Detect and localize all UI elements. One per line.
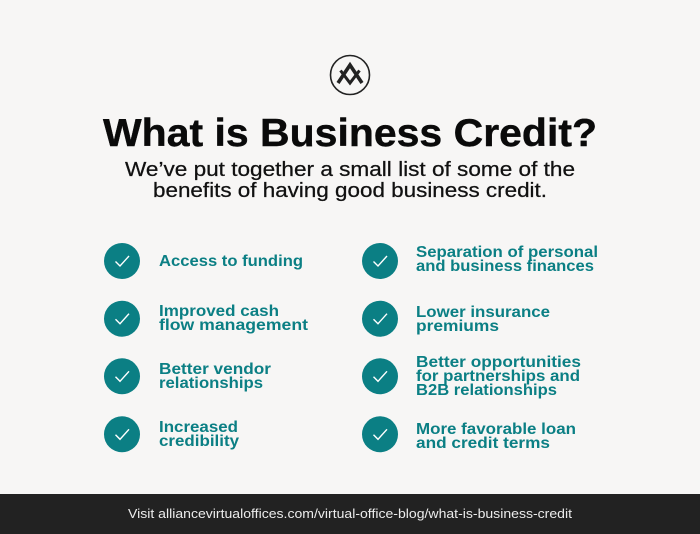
subtitle: We’ve put together a small list of some of the [125,159,575,181]
benefit: lower insurance premiums: premiums [416,318,499,335]
benefit: better opportunities [362,354,581,399]
subtitle [125,159,575,202]
benefit: better opportunities: Better opportunities [416,354,581,371]
benefit: better vendor relationships: relationships [159,375,263,392]
benefit: improved cash flow: flow management [159,317,309,334]
benefit: separation of finances: Separation of personal [416,244,598,261]
benefit: improved cash flow [104,301,309,337]
footer bar: Visit alliancevirtualoffices.com/virtual-office-blog/what-is-business-credit [128,506,572,521]
benefit: improved cash flow: Improved cash [159,303,279,320]
benefit: better vendor relationships [104,358,271,394]
benefit: favorable loan terms: More favorable loan [416,421,576,438]
subtitle: benefits of having good business credit. [153,180,547,202]
benefit: better opportunities: B2B relationships [416,382,557,399]
benefit: increased credibility: Increased [159,419,238,436]
benefit: access to funding: Access to funding [159,253,303,270]
benefit: separation of finances [362,243,598,279]
footer bar [0,494,700,534]
benefit: increased credibility: credibility [159,433,239,450]
benefit: lower insurance premiums [362,301,550,337]
benefit: favorable loan terms [362,416,576,452]
benefit: favorable loan terms: and credit terms [416,435,550,452]
benefit: access to funding [104,243,303,279]
benefit: lower insurance premiums: Lower insurance [416,304,550,321]
icon: logo [330,56,370,94]
benefit: increased credibility [104,416,239,452]
benefit: separation of finances: and business finances [416,258,594,275]
title: What is Business Credit? [103,112,597,155]
benefit: better vendor relationships: Better vendor [159,361,271,378]
benefit: better opportunities: for partnerships and [416,368,580,385]
